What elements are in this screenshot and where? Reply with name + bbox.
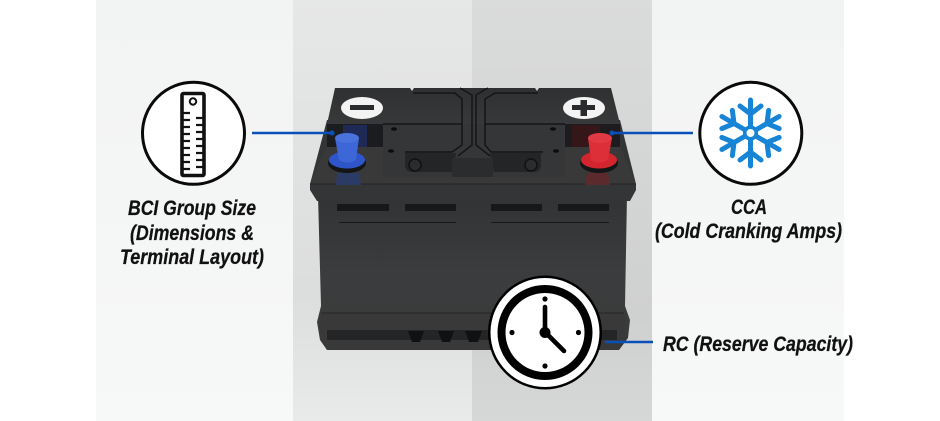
label: BCI group size: (Dimensions & — [130, 222, 254, 245]
connector line: RC — [605, 341, 653, 343]
negative terminal — [328, 133, 366, 185]
top deck — [310, 120, 636, 201]
label: RC: RC (Reserve Capacity) — [663, 333, 853, 356]
label: CCA: CCA — [731, 196, 767, 219]
battery case — [317, 195, 630, 350]
label: BCI group size: BCI Group Size — [128, 197, 256, 220]
label: BCI group size: Terminal Layout) — [120, 246, 264, 269]
plus badge — [563, 97, 605, 119]
vents — [337, 204, 609, 223]
icon: ruler — [142, 82, 244, 184]
lid grooves — [383, 88, 565, 156]
connector line: CCA — [610, 130, 693, 136]
connector line: group size — [252, 130, 334, 136]
hinges — [405, 153, 541, 177]
label: CCA: (Cold Cranking Amps) — [655, 220, 842, 243]
battery — [310, 88, 636, 350]
background panels — [96, 0, 844, 421]
icon: clock — [488, 276, 602, 390]
drain notches — [408, 331, 482, 342]
lid — [327, 88, 620, 124]
label: BCI group size — [120, 197, 264, 269]
positive terminal — [580, 133, 618, 185]
screw holes — [388, 127, 559, 153]
label: CCA — [655, 196, 842, 243]
base flange — [320, 312, 628, 350]
minus badge — [341, 97, 383, 119]
terminal recesses — [327, 124, 383, 147]
icon: snowflake — [700, 82, 802, 184]
